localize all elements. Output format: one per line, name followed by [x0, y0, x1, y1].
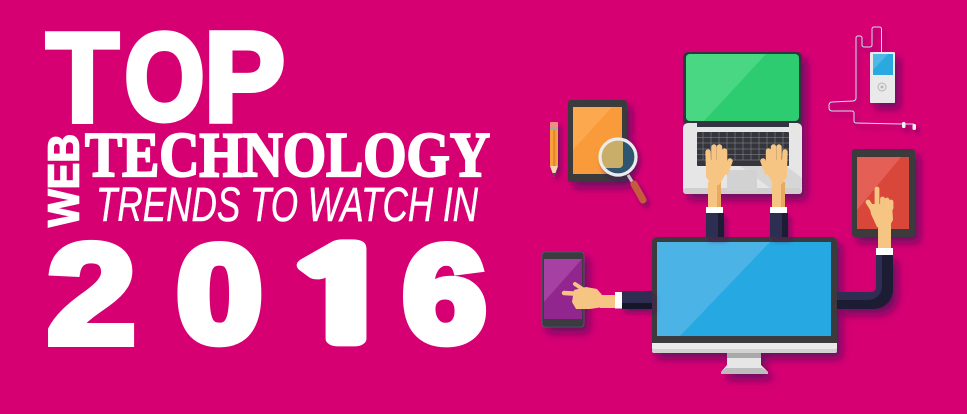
earphone cable [829, 27, 916, 130]
monitor stand [721, 353, 768, 374]
player body [870, 52, 895, 103]
icon: magnifying glass [600, 139, 643, 200]
icon: red tablet [852, 149, 915, 237]
laptop base [683, 121, 802, 194]
title: top: T [46, 6, 120, 150]
title: top: P [204, 6, 285, 148]
title: web (vertical): WEB [40, 134, 88, 227]
title: 2016: 0 [177, 218, 262, 370]
icon: orange tablet [568, 100, 627, 182]
arms: sleeves to laptop [706, 213, 788, 237]
laptop keyboard [697, 132, 789, 166]
title: 2016: 1 [280, 235, 402, 359]
icon: music player with earphones [829, 27, 916, 130]
monitor body [652, 237, 837, 353]
monitor screen [657, 242, 831, 336]
arm: right pointing at tablet [837, 189, 893, 309]
title: 2016 [47, 215, 486, 374]
laptop lid [683, 52, 802, 125]
illustration: devices [542, 27, 916, 374]
title: top: O [125, 9, 204, 145]
icon: monitor [652, 237, 837, 374]
title: 2016: 6 [403, 218, 486, 370]
subtitle: trends to watch in: TRENDS TO WATCH IN [96, 179, 478, 232]
title: 2016: 2 [47, 215, 136, 374]
title: top [46, 6, 285, 150]
title: technology: TECHNOLOGY [85, 119, 490, 190]
icon: pencil [550, 122, 558, 177]
icon: laptop [683, 52, 802, 194]
arm: left pointing at phone [564, 284, 652, 309]
icon: phone [542, 252, 584, 327]
hand: left on laptop [706, 147, 730, 213]
hand: right on laptop [763, 147, 787, 213]
